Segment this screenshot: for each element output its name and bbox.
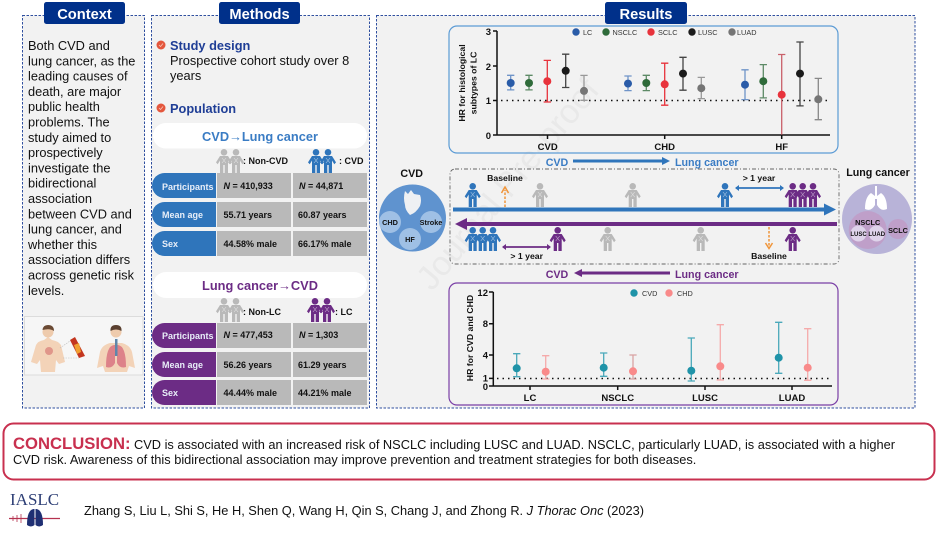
table: CVD to lung cancer: 44.58% male bbox=[224, 239, 277, 249]
conclusion box: CONCLUSION: bbox=[13, 434, 131, 453]
chart: HR for histological subtypes of LC bbox=[449, 26, 838, 153]
axes: HF bbox=[775, 142, 788, 153]
table: lung cancer to CVD: 44.21% male bbox=[298, 388, 352, 398]
legend: histological subtypes: LUSC bbox=[698, 28, 717, 37]
legend: histological subtypes: LC bbox=[583, 28, 592, 37]
table: CVD to lung cancer: Sex bbox=[162, 239, 178, 249]
heading: results bbox=[605, 2, 687, 24]
interval: over one year reverse: > 1 year bbox=[510, 251, 544, 261]
arrow label: CVD to lung cancer: CVD bbox=[546, 157, 569, 169]
axes: NSCLC bbox=[601, 393, 634, 404]
arrow: reverse timeline bbox=[455, 218, 837, 230]
LUSC points bbox=[687, 325, 724, 381]
table: CVD to lung cancer bbox=[152, 123, 367, 256]
context text block: problems. The bbox=[28, 114, 110, 130]
reference line at HR 1 bbox=[497, 378, 832, 380]
arrow label: lung cancer to CVD bbox=[546, 269, 739, 281]
axes: 8 bbox=[483, 319, 488, 330]
LC points bbox=[513, 354, 550, 379]
table: lung cancer to CVD: 61.29 years bbox=[298, 360, 347, 370]
CVD circle diagram: Stroke bbox=[420, 218, 442, 227]
table: lung cancer to CVD: Lung cancer→CVD bbox=[202, 278, 318, 293]
logo: IASLC: IASLC bbox=[10, 490, 59, 509]
lung cancer circle diagram: Lung cancer bbox=[846, 167, 910, 179]
panel: context bbox=[22, 2, 144, 408]
heading: context bbox=[44, 2, 125, 24]
table: CVD to lung cancer: : CVD bbox=[339, 156, 364, 166]
axes: 2 bbox=[486, 62, 491, 73]
panel: results bbox=[376, 2, 915, 408]
interval: over one year forward bbox=[735, 173, 784, 191]
axes bbox=[477, 288, 832, 404]
table: lung cancer to CVD bbox=[152, 272, 367, 405]
context text block: leading causes of bbox=[28, 69, 128, 84]
legend: histological subtypes: SCLC bbox=[658, 28, 677, 37]
y axis title: HR for histological bbox=[457, 44, 467, 122]
conclusion box: CVD is associated with an increased risk of NSCLC including LUSC and LUAD. NSCLC, particularly LUAD, is associated with a higher bbox=[134, 437, 896, 452]
CVD circle diagram: CHD bbox=[382, 218, 398, 227]
legend: histological subtypes: LUAD bbox=[737, 28, 756, 37]
axes: CVD bbox=[538, 142, 558, 153]
watermark: Journal Pre-proof bbox=[409, 71, 607, 297]
interval: over one year forward: > 1 year bbox=[743, 173, 776, 183]
axes: 3 bbox=[486, 27, 491, 38]
context text block: levels. bbox=[28, 283, 64, 298]
arrow: forward timeline bbox=[453, 204, 836, 216]
baseline marker: forward bbox=[487, 173, 523, 207]
study design: Study design bbox=[170, 38, 251, 53]
context text block: prospectively bbox=[28, 145, 103, 160]
lung cancer circle diagram: NSCLC bbox=[855, 218, 881, 227]
context text block: association bbox=[28, 191, 92, 206]
axes: 1 bbox=[483, 374, 489, 384]
icon: lungs bbox=[865, 186, 887, 210]
lung cancer circle diagram: LUSC bbox=[850, 232, 867, 238]
table: lung cancer to CVD: 44.44% male bbox=[224, 388, 277, 398]
forward timeline people bbox=[465, 183, 821, 207]
study design: Prospective cohort study over 8 bbox=[170, 53, 349, 68]
lung cancer circle diagram: SCLC bbox=[888, 226, 909, 235]
CVD circle diagram: CVD bbox=[400, 168, 423, 180]
heading: methods: Methods bbox=[229, 7, 290, 23]
axes: 12 bbox=[477, 288, 488, 299]
heading: methods bbox=[219, 2, 300, 24]
CVD circle diagram bbox=[379, 168, 446, 252]
table: lung cancer to CVD: Mean age bbox=[162, 360, 203, 370]
legend: CVD and CHD: CHD bbox=[677, 289, 693, 298]
table: lung cancer to CVD: Participants bbox=[162, 331, 214, 341]
lung cancer circle diagram: LUAD bbox=[868, 232, 886, 238]
legend: CVD and CHD: CVD bbox=[642, 289, 657, 298]
CVD group points bbox=[507, 54, 588, 102]
table: CVD to lung cancer: Mean age bbox=[162, 210, 203, 220]
NSCLC points bbox=[600, 353, 637, 379]
axes: LC bbox=[524, 393, 536, 404]
table: CVD to lung cancer: 66.17% male bbox=[298, 239, 352, 249]
baseline marker: reverse bbox=[751, 227, 787, 261]
heading: results: Results bbox=[620, 7, 672, 23]
axes: LUAD bbox=[779, 393, 805, 404]
table: lung cancer to CVD: N = 477,453 bbox=[224, 330, 273, 340]
study design bbox=[156, 38, 349, 83]
table: CVD to lung cancer: : Non-CVD bbox=[243, 156, 288, 166]
table: lung cancer to CVD: : Non-LC bbox=[243, 307, 281, 317]
timeline bbox=[450, 169, 839, 264]
CVD circle diagram: HF bbox=[405, 235, 415, 244]
table: lung cancer to CVD: N = 1,303 bbox=[299, 330, 338, 340]
icon: heart bbox=[404, 190, 421, 215]
table: CVD to lung cancer: Participants bbox=[162, 182, 214, 192]
illustration: patients with heart and lung disease bbox=[24, 316, 143, 375]
axes bbox=[486, 27, 830, 153]
table: CVD to lung cancer: 55.71 years bbox=[224, 210, 272, 220]
axes: CHD bbox=[654, 142, 675, 153]
reverse timeline people bbox=[465, 227, 801, 251]
y axis title: subtypes of LC bbox=[468, 51, 478, 114]
context text block: lung cancer, as the bbox=[28, 53, 135, 68]
context text block: death, are major bbox=[28, 84, 122, 99]
context text block: across genetic risk bbox=[28, 268, 135, 282]
table: CVD to lung cancer: N = 44,871 bbox=[299, 181, 343, 191]
axes: 1 bbox=[486, 96, 492, 107]
conclusion box: CVD risk. Awareness of this bidirectional association may improve prevention and treatment strategies for both diseases. bbox=[13, 452, 696, 467]
table: CVD to lung cancer: 60.87 years bbox=[298, 210, 347, 220]
axes: LUSC bbox=[692, 393, 718, 404]
context text block: bidirectional bbox=[28, 176, 96, 191]
conclusion box bbox=[4, 424, 934, 480]
context text block: study aimed to bbox=[28, 130, 111, 145]
arrow label: lung cancer to CVD: CVD bbox=[546, 269, 569, 281]
baseline marker: reverse: Baseline bbox=[751, 251, 787, 261]
context text block: investigate the bbox=[28, 160, 111, 175]
arrow label: lung cancer to CVD: Lung cancer bbox=[675, 269, 739, 281]
context text block: lung cancer, and bbox=[28, 222, 122, 237]
y axis title: HR for CVD and CHD bbox=[465, 295, 475, 381]
panel: methods bbox=[152, 2, 370, 408]
table: CVD to lung cancer: CVD→Lung cancer bbox=[202, 129, 318, 144]
population: Population bbox=[170, 101, 236, 116]
context text block: Both CVD and bbox=[28, 38, 110, 53]
heading: context: Context bbox=[57, 7, 112, 23]
interval: over one year reverse bbox=[502, 244, 551, 261]
context text block: association differs bbox=[28, 252, 130, 267]
context text block: between CVD and bbox=[28, 206, 132, 221]
CHD group points bbox=[624, 57, 705, 105]
lung cancer circle diagram bbox=[842, 167, 912, 254]
table: lung cancer to CVD: 56.26 years bbox=[224, 360, 272, 370]
LUAD points bbox=[775, 322, 812, 380]
axes: 4 bbox=[483, 350, 489, 362]
table: lung cancer to CVD: Sex bbox=[162, 388, 178, 398]
HF group points bbox=[741, 42, 822, 134]
baseline marker: forward: Baseline bbox=[487, 173, 523, 183]
context text block: whether this bbox=[27, 237, 97, 252]
legend: CVD and CHD bbox=[630, 289, 693, 298]
legend: histological subtypes: NSCLC bbox=[612, 28, 637, 37]
arrow label: CVD to lung cancer: Lung cancer bbox=[675, 157, 739, 169]
axes: 0 bbox=[483, 382, 488, 393]
context text block: public health bbox=[28, 99, 100, 114]
reference line at HR 1 bbox=[501, 100, 830, 102]
arrow label: CVD to lung cancer bbox=[546, 157, 739, 169]
table: CVD to lung cancer: N = 410,933 bbox=[224, 181, 273, 191]
axes: 0 bbox=[486, 131, 491, 142]
legend: histological subtypes bbox=[572, 28, 756, 37]
study design: years bbox=[170, 68, 201, 83]
citation: Zhang S, Liu L, Shi S, He H, Shen Q, Wang H, Qin S, Chang J, and Zhong R. J Thorac Onc (2023) bbox=[84, 503, 644, 518]
logo: IASLC bbox=[9, 490, 60, 526]
table: lung cancer to CVD: : LC bbox=[335, 307, 353, 317]
chart: HR for CVD and CHD bbox=[449, 283, 838, 405]
